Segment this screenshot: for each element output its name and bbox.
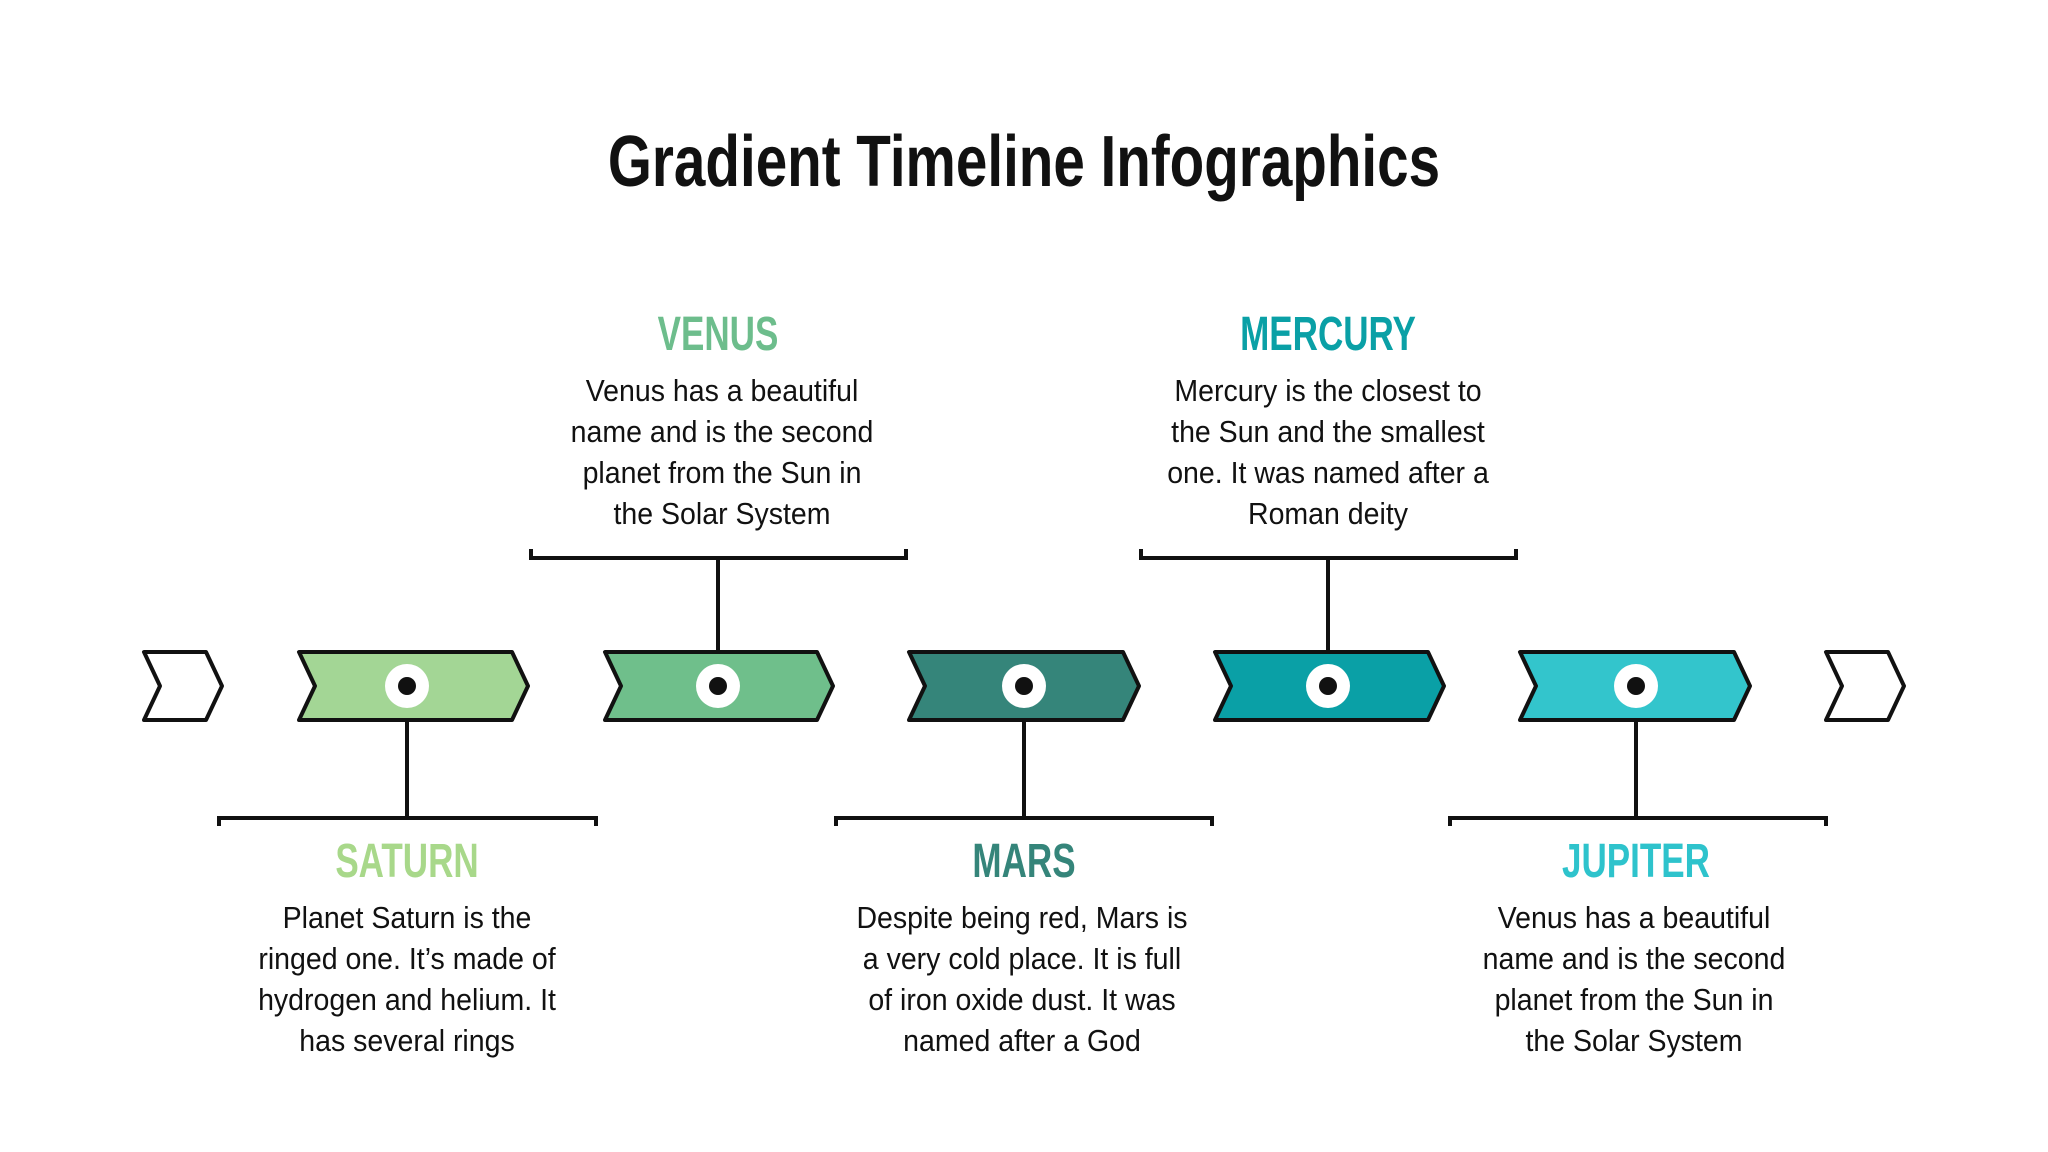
start chevron — [144, 652, 222, 720]
text: venus: Venus has a beautiful — [586, 374, 858, 408]
arrow: venus — [605, 652, 833, 720]
text: mercury: Roman deity — [1248, 497, 1408, 531]
text: jupiter: the Solar System — [1525, 1024, 1743, 1058]
text: venus: name and is the second — [571, 415, 873, 449]
arrow: jupiter — [1520, 652, 1750, 720]
text: saturn: ringed one. It’s made of — [258, 942, 556, 976]
text: mercury — [1167, 307, 1489, 531]
arrow: mars — [909, 652, 1139, 720]
end chevron — [1826, 652, 1904, 720]
text: saturn: Planet Saturn is the — [283, 901, 531, 935]
connector lines — [219, 549, 1826, 826]
text: mercury: MERCURY — [1240, 307, 1416, 360]
text: jupiter: planet from the Sun in — [1495, 983, 1773, 1017]
text: mars: named after a God — [903, 1024, 1141, 1058]
text: jupiter: JUPITER — [1562, 834, 1710, 887]
text: venus: planet from the Sun in — [583, 456, 861, 490]
text: venus: the Solar System — [613, 497, 831, 531]
text: mercury: one. It was named after a — [1167, 456, 1489, 490]
text: mercury: Mercury is the closest to — [1174, 374, 1482, 408]
text: jupiter — [1483, 834, 1785, 1058]
text: mars — [856, 834, 1188, 1058]
text: saturn — [258, 834, 557, 1058]
text: mars: a very cold place. It is full — [863, 942, 1181, 976]
text: mercury: the Sun and the smallest — [1171, 415, 1486, 449]
text: jupiter: name and is the second — [1483, 942, 1785, 976]
text: mars: of iron oxide dust. It was — [868, 983, 1176, 1017]
text: mars: Despite being red, Mars is — [856, 901, 1188, 935]
text: venus — [571, 307, 873, 531]
text: mars: MARS — [972, 834, 1076, 887]
arrow: saturn — [299, 652, 528, 720]
text: saturn: hydrogen and helium. It — [258, 983, 557, 1017]
title: Gradient Timeline Infographics — [608, 120, 1440, 202]
text: jupiter: Venus has a beautiful — [1498, 901, 1770, 935]
arrow: mercury — [1215, 652, 1444, 720]
text: saturn: SATURN — [335, 834, 479, 887]
text: saturn: has several rings — [299, 1024, 515, 1058]
text: venus: VENUS — [658, 307, 778, 360]
